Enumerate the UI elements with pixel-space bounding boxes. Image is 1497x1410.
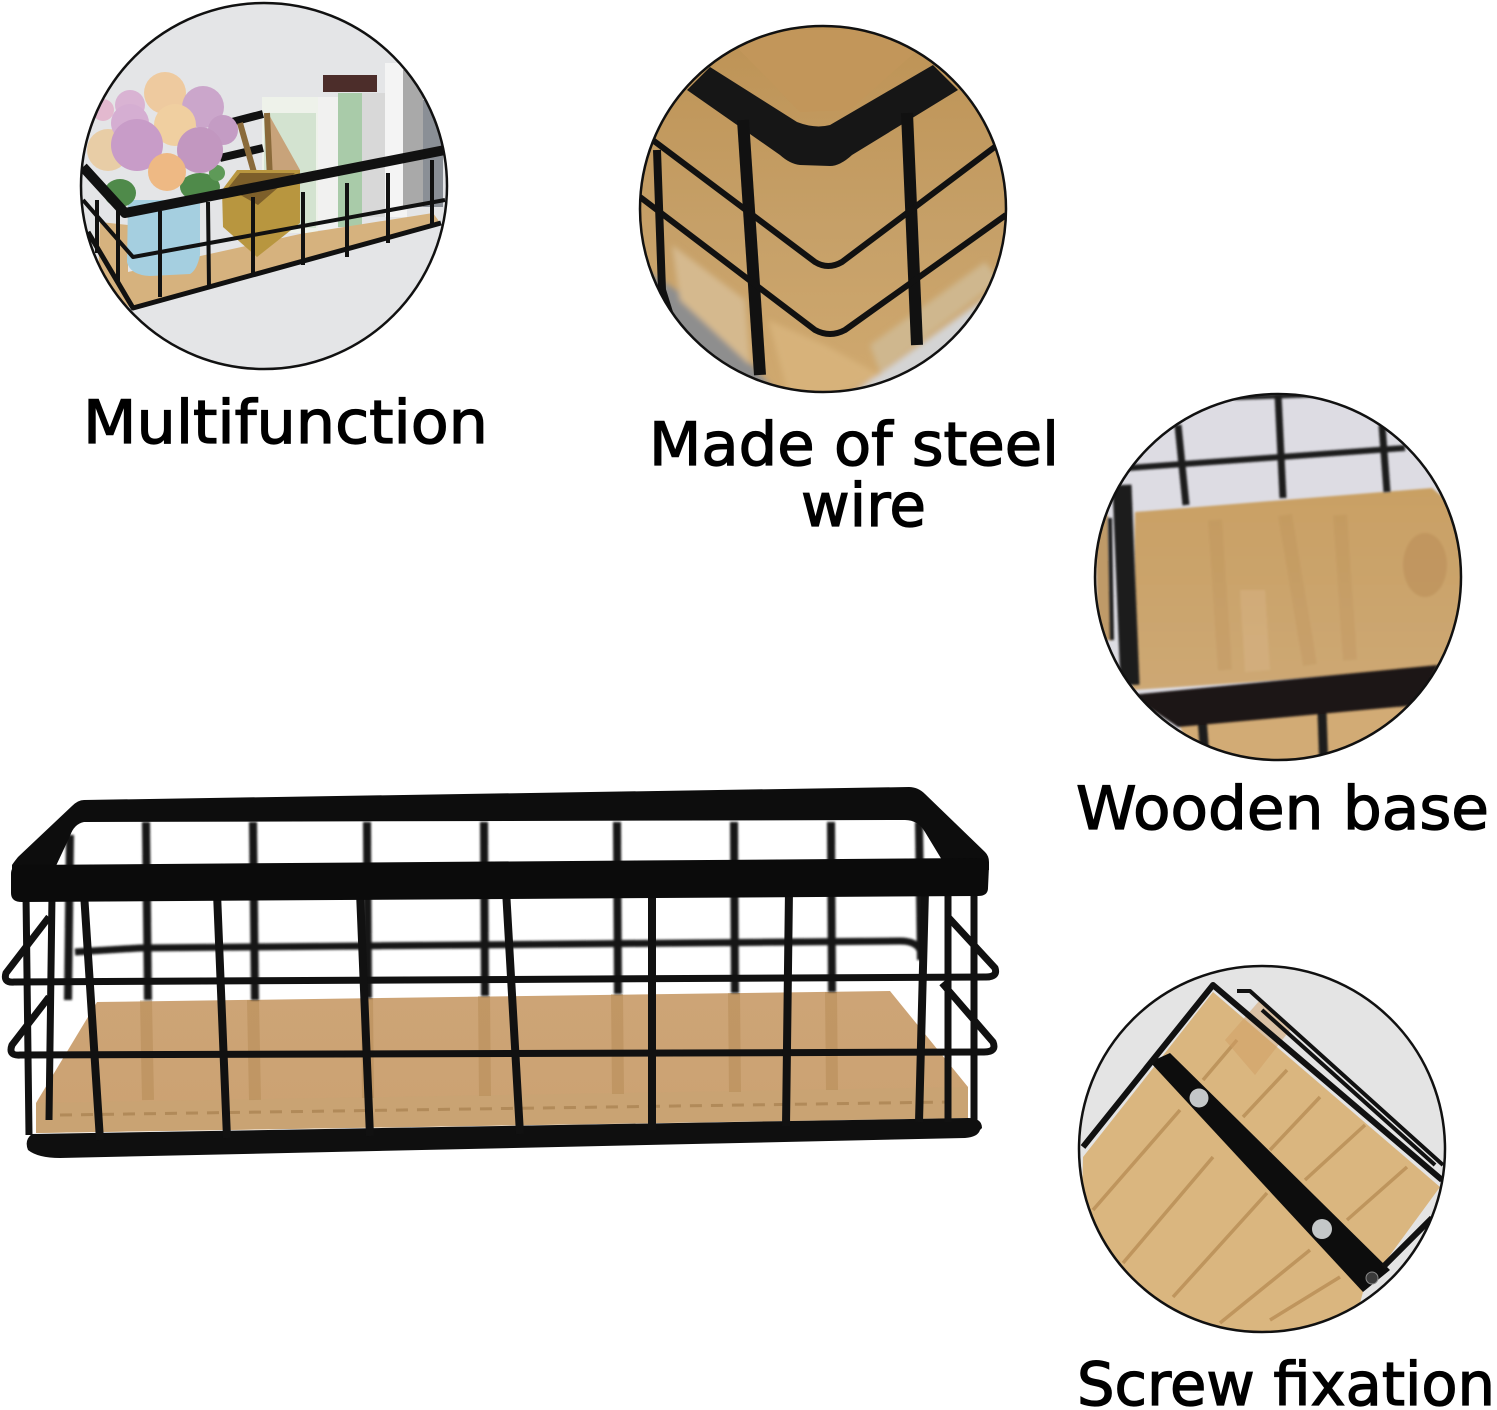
top rim [12, 787, 989, 880]
horizontal wires [5, 917, 996, 1055]
circle: wooden base close-up [1090, 390, 1470, 775]
circle: steel wire close-up [635, 20, 1015, 405]
books [262, 63, 443, 233]
wood strips [1093, 1040, 1407, 1323]
pen holder [222, 113, 300, 257]
label: Multifunction: Multifunction [83, 388, 488, 458]
wire frame [640, 65, 1006, 380]
blurred wire grid [1110, 394, 1438, 770]
screws [1190, 1088, 1378, 1284]
metal bar [1150, 1053, 1390, 1292]
label: Made of steel wire: Made of steel [649, 410, 1059, 480]
vase [127, 200, 200, 276]
label: Made of steel wire [649, 410, 1059, 541]
label: Made of steel wire: wire [801, 471, 926, 541]
bottom frame [27, 1118, 982, 1158]
lower plank and background [653, 246, 994, 390]
back rim of basket [220, 114, 263, 158]
front rim band [11, 858, 989, 902]
circle: screw fixation close-up [1075, 960, 1450, 1340]
wooden base [98, 213, 441, 310]
circle: multifunction basket in use [80, 0, 450, 370]
label: Wooden base: Wooden base [1076, 774, 1489, 844]
wire rim and grid [83, 150, 445, 308]
back wire grid [68, 822, 921, 1000]
main product: wire basket with wooden base [5, 787, 996, 1158]
wire frame [1083, 985, 1443, 1267]
rear wood face above rim [720, 30, 940, 112]
flowers [87, 72, 238, 207]
wooden base [36, 991, 968, 1133]
blurred wood board [1095, 488, 1470, 775]
front vertical wires [84, 890, 925, 1140]
side frames [26, 892, 974, 1135]
